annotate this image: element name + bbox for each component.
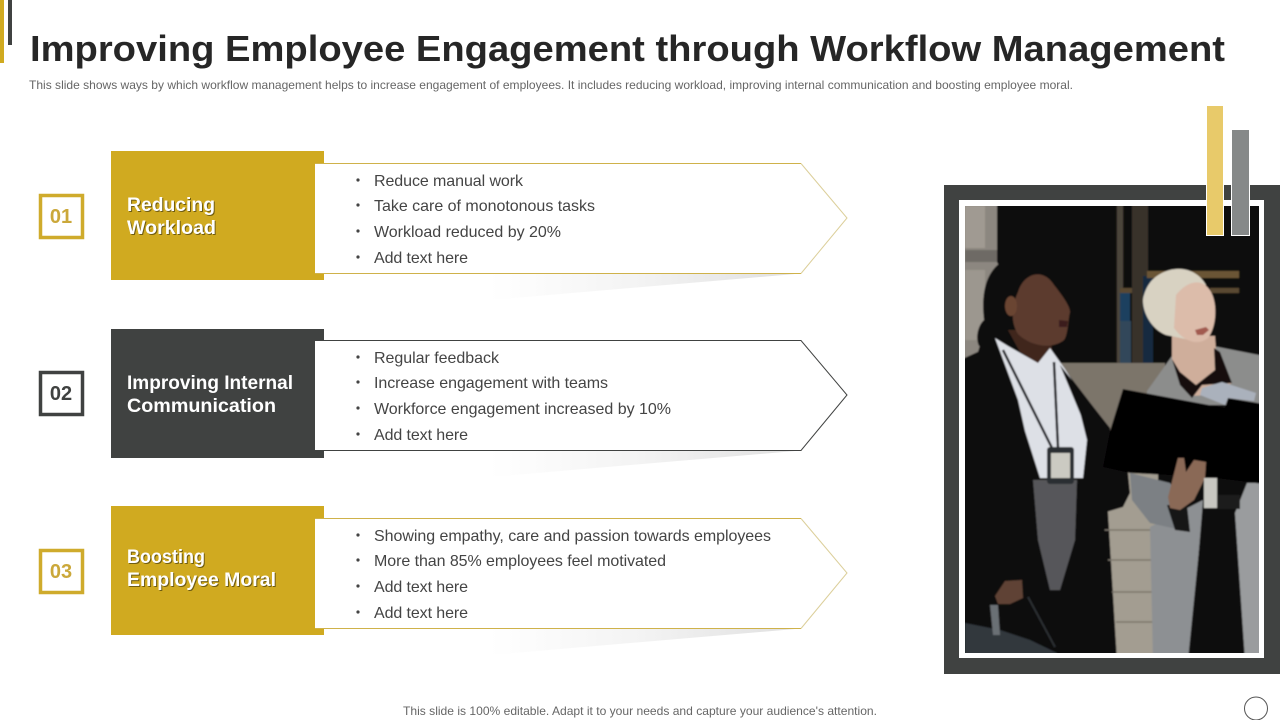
arrow panel with bullets: Workforce engagement increased by 10% [374, 401, 671, 418]
arrow shadow [490, 274, 795, 300]
number badge 02: 02 [50, 383, 72, 405]
heading block: reducing workload [111, 151, 324, 280]
right woman: neck [1172, 336, 1232, 396]
heading block: reducing workload: Reducing [127, 195, 215, 216]
number badge 01: 01 [50, 206, 72, 228]
heading block: boosting employee moral [111, 506, 324, 635]
row 3: boosting employee moral [40, 506, 847, 655]
left woman: trousers [1033, 480, 1077, 590]
row 1: reducing workload [40, 151, 847, 300]
footer note: This slide is 100% editable. Adapt it to your needs and capture your audience's attention. [403, 704, 877, 718]
folder [1103, 389, 1264, 484]
left woman: lanyard and badge [1003, 350, 1058, 448]
heading block: boosting employee moral: Employee Moral [127, 570, 276, 591]
right woman: sleeve [1130, 472, 1174, 528]
heading block: improving internal communication: Communication [127, 396, 276, 417]
building column [965, 206, 1000, 360]
door frame and glass [1117, 200, 1123, 365]
right woman: coat [1147, 346, 1264, 405]
decorative bars: yellow and grey [1206, 106, 1250, 236]
icon: circle [1244, 697, 1268, 720]
heading block: boosting employee moral: Boosting [127, 547, 205, 568]
arrow panel with bullets: Add text here [374, 605, 468, 622]
arrow panel with bullets [315, 340, 847, 450]
left woman: coat lapel over shirt [1060, 365, 1112, 432]
left woman: hair [976, 264, 1053, 346]
photo: two businesswomen with folder [960, 200, 1264, 660]
arrow panel with bullets [315, 518, 847, 628]
number badge 03: 03 [50, 561, 72, 583]
number badge 01 [40, 196, 82, 238]
left woman: coat [960, 344, 1130, 660]
right woman: inner black top [1172, 348, 1232, 398]
title: Improving Employee Engagement through Workflow Management [30, 28, 1225, 69]
number badge 03 [40, 550, 82, 592]
arrow panel with bullets: Regular feedback [374, 350, 500, 367]
heading block: improving internal communication: Improving Internal [127, 373, 293, 394]
row 2: improving internal communication [40, 329, 847, 477]
right woman: hand and tag [1168, 458, 1206, 510]
number badge 02 [40, 372, 82, 414]
arrow panel with bullets: More than 85% employees feel motivated [374, 553, 666, 570]
bag and hand [965, 622, 1058, 653]
photo frame [944, 185, 1280, 674]
right woman: hair [1143, 269, 1206, 340]
left woman: neck [1008, 330, 1052, 364]
right woman: lower coat panels [1150, 500, 1203, 660]
arrow panel with bullets: Reduce manual work [374, 173, 524, 190]
left woman: shirt [995, 338, 1087, 478]
arrow shadow [490, 629, 795, 655]
heading block: reducing workload: Workload [127, 218, 216, 239]
heading block: improving internal communication [111, 329, 324, 458]
arrow panel with bullets: Workload reduced by 20% [374, 224, 561, 241]
arrow panel with bullets: Increase engagement with teams [374, 375, 608, 392]
arrow panel with bullets: Add text here [374, 579, 468, 596]
subtitle: This slide shows ways by which workflow management helps to increase engagement of employees. It includes reducing workload, improving internal communication and boosting employee moral. [29, 78, 1073, 92]
arrow shadow [490, 451, 795, 477]
right woman: face [1174, 282, 1215, 342]
paper [1200, 382, 1256, 405]
left woman: face [1013, 274, 1070, 346]
arrow panel with bullets [315, 163, 847, 274]
stone pavement and steps [1060, 363, 1165, 433]
arrow panel with bullets: Take care of monotonous tasks [374, 198, 595, 215]
arrow panel with bullets: Add text here [374, 250, 468, 267]
arrow panel with bullets: Showing empathy, care and passion towards employees [374, 528, 771, 545]
arrow panel with bullets: Add text here [374, 427, 468, 444]
accent bars: top left [0, 0, 12, 63]
